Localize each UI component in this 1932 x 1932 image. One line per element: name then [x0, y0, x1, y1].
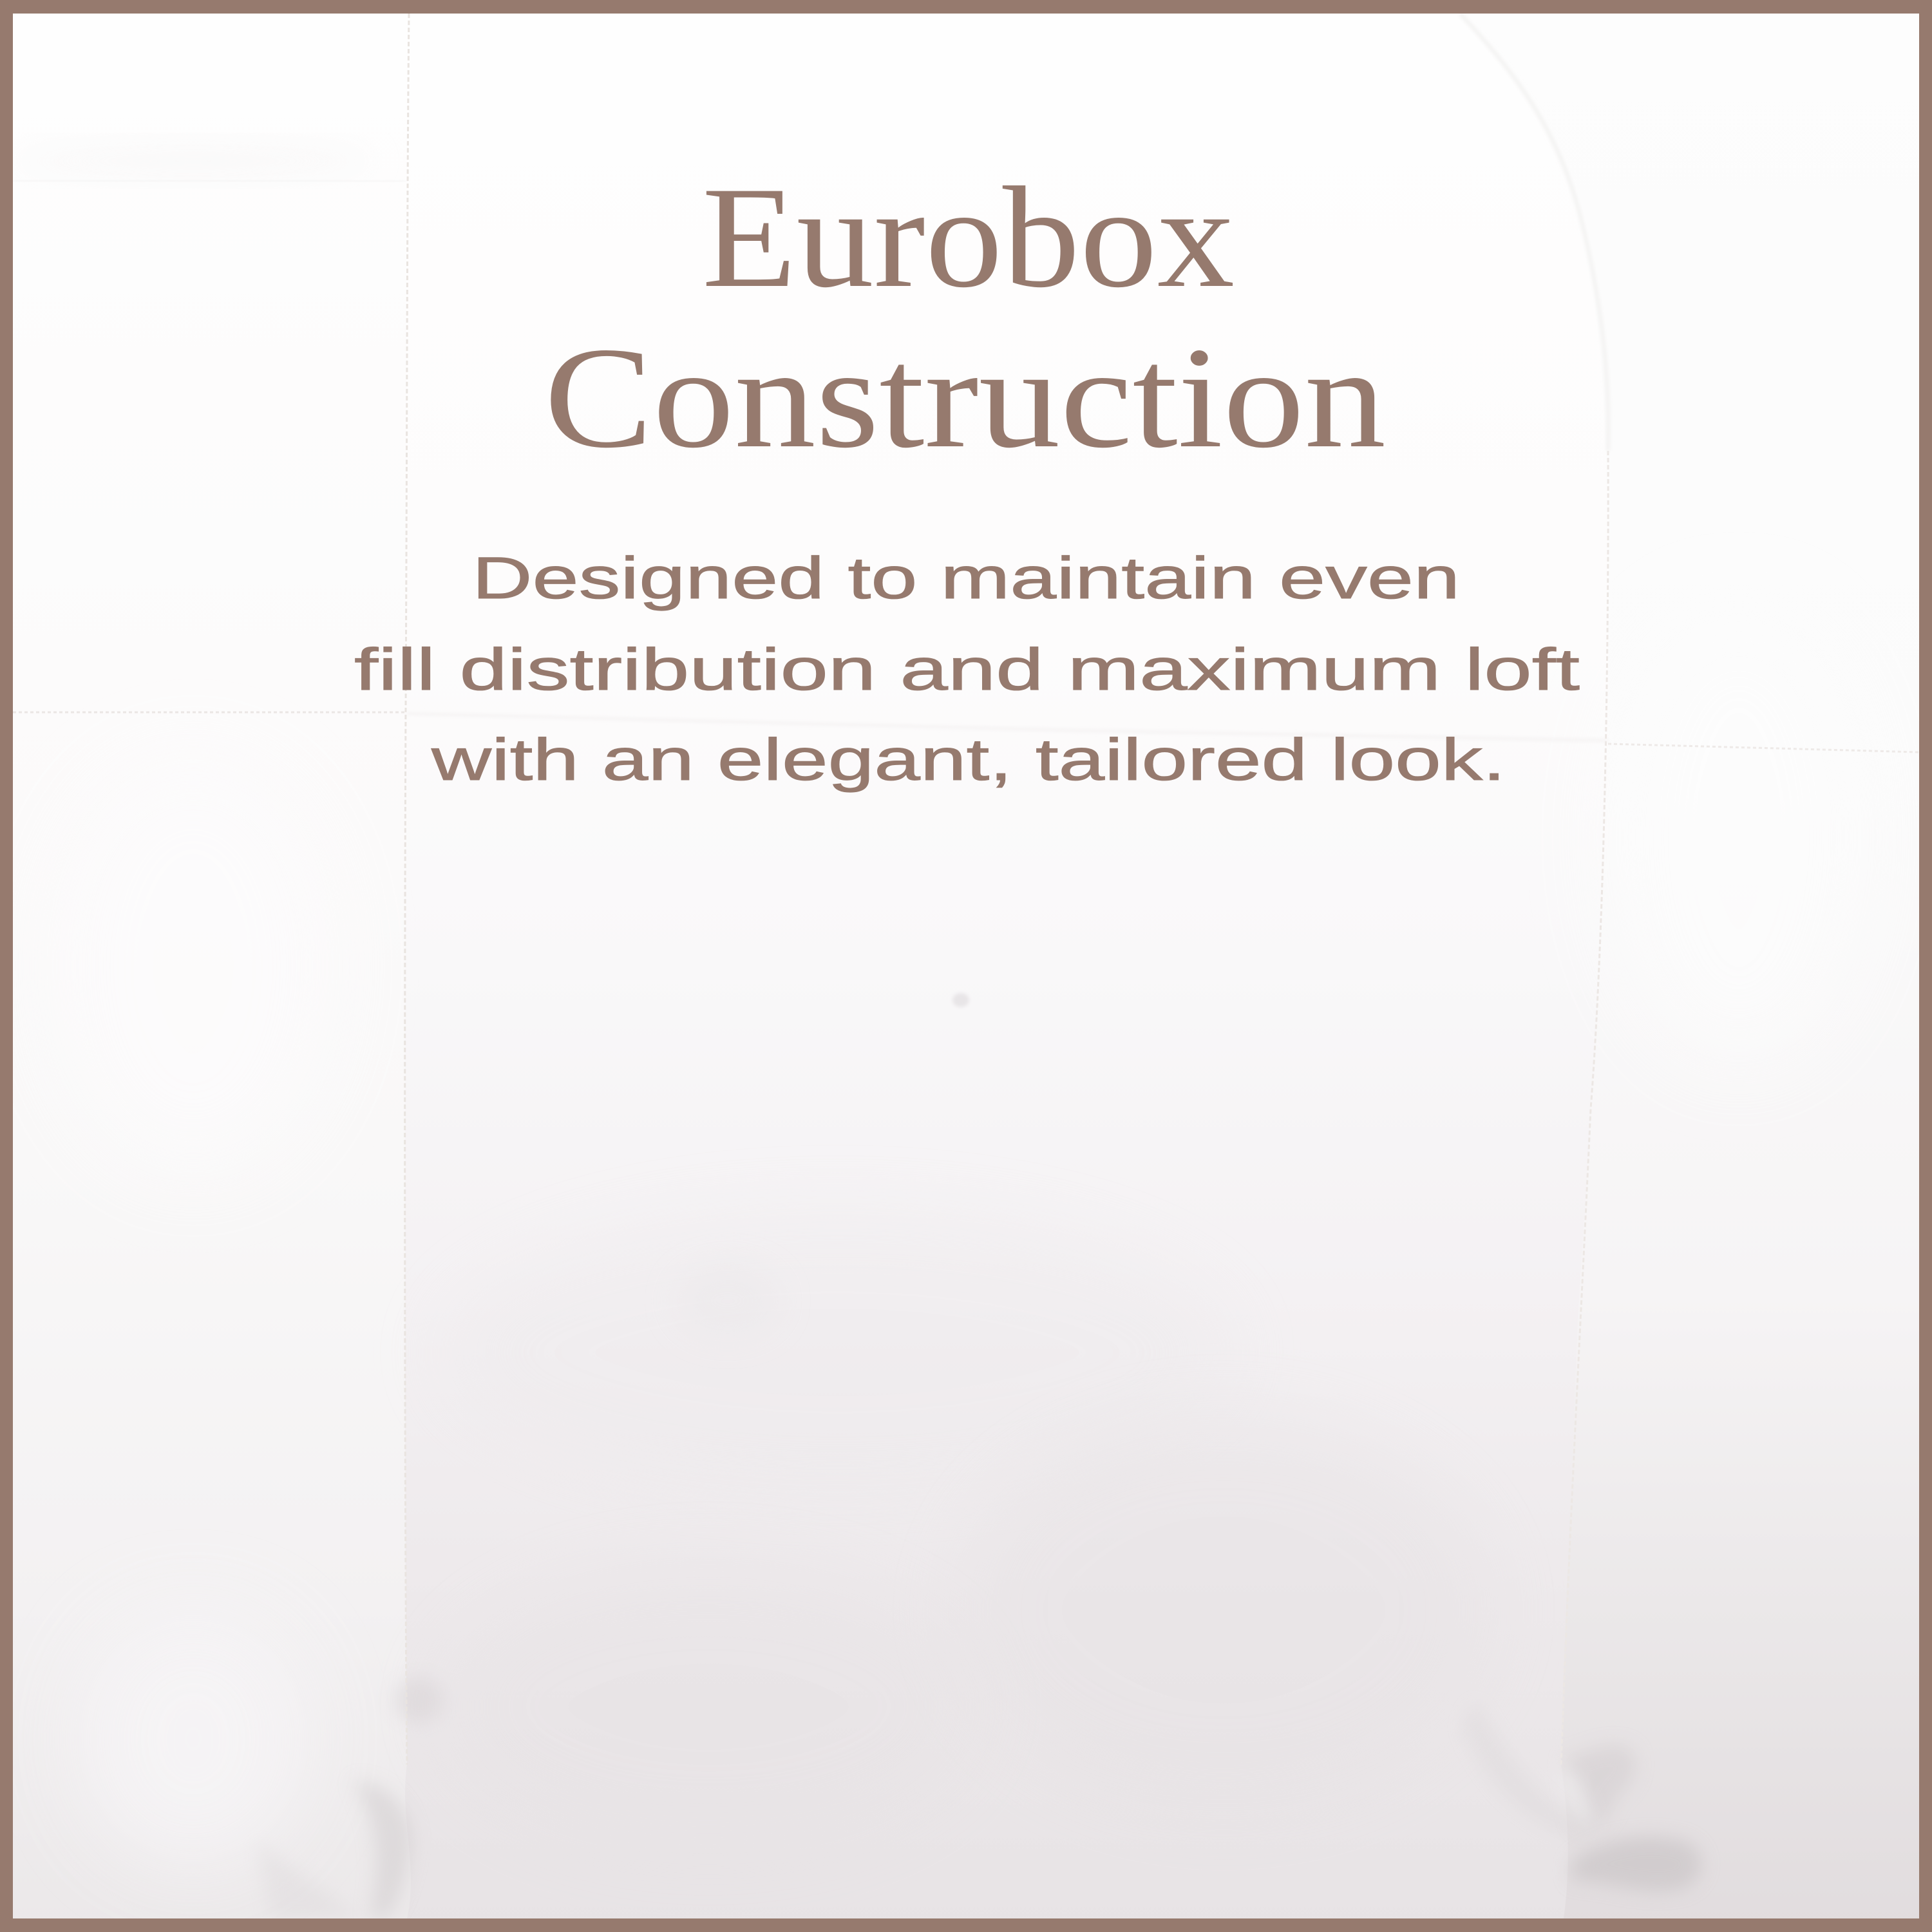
description line 1: Designed to maintain even — [472, 545, 1460, 611]
soft shadows and folds — [156, 189, 1556, 1824]
title line 2: Construction — [544, 317, 1386, 478]
right duvet panel — [1417, 14, 1919, 1918]
centre duvet panel — [425, 14, 1417, 1918]
title line 1: Eurobox — [702, 156, 1235, 317]
bottom left gather folds — [361, 1685, 435, 1914]
description text — [354, 545, 1580, 793]
title — [544, 156, 1386, 478]
left duvet panel — [13, 14, 425, 1918]
description line 3: with an elegant, tailored look. — [431, 727, 1506, 793]
description line 2: fill distribution and maximum loft — [354, 637, 1580, 703]
bottom right gather folds — [1571, 1750, 1701, 1892]
